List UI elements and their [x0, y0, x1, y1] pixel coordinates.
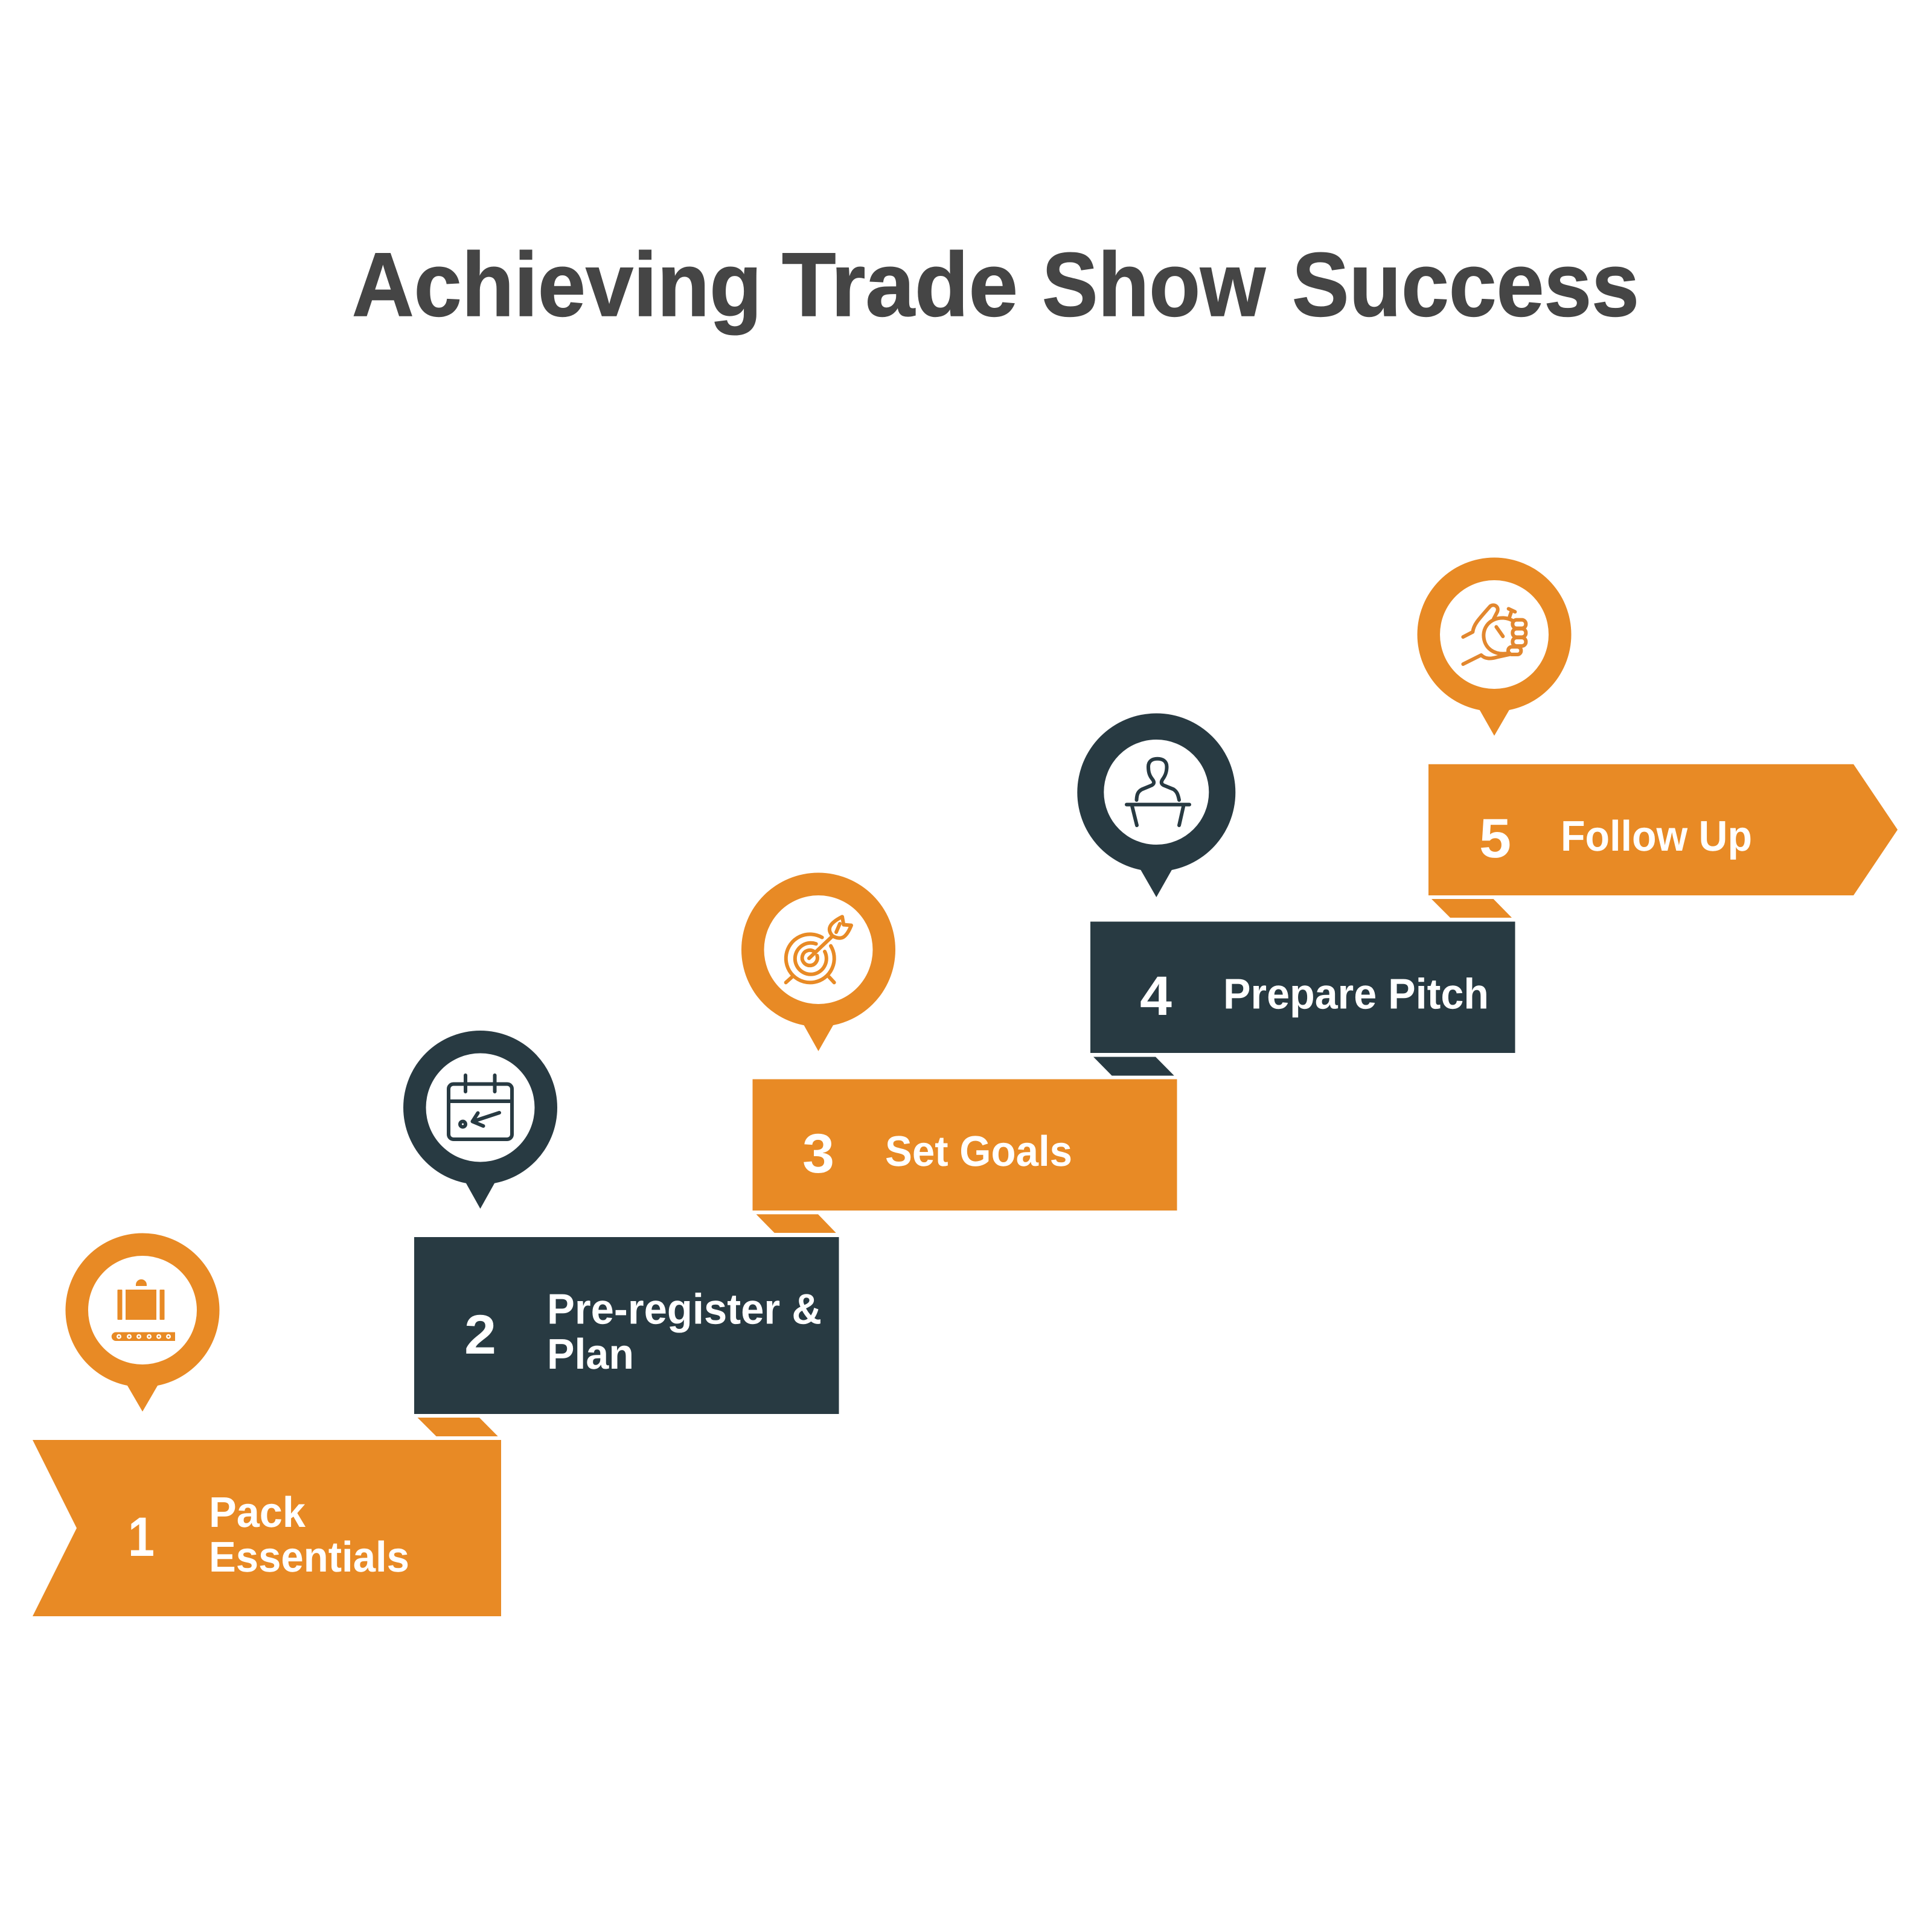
- number 1: 1: [128, 1506, 155, 1568]
- label: Pack Essentials: Pack: [209, 1489, 305, 1537]
- label: Pack Essentials: Essentials: [209, 1534, 409, 1581]
- panel: step 5: [1418, 558, 1898, 918]
- label: Prepare Pitch: Prepare Pitch: [1223, 971, 1489, 1018]
- number 4: 4: [1140, 965, 1172, 1027]
- number 5: 5: [1479, 808, 1511, 869]
- banner 4: [1090, 921, 1515, 1053]
- title: Show: [1042, 234, 1265, 335]
- number 3: 3: [802, 1123, 834, 1185]
- fold under banner 4: [1093, 1057, 1174, 1076]
- icon: luggage on conveyor: [112, 1279, 175, 1341]
- banner 1: [33, 1440, 501, 1616]
- number 2: 2: [464, 1304, 496, 1366]
- title: Trade: [782, 234, 1018, 335]
- label: Set Goals: Set Goals: [885, 1128, 1072, 1176]
- banner 2: [414, 1237, 839, 1414]
- title: Achieving: [352, 234, 762, 335]
- fold under banner 5: [1431, 899, 1512, 918]
- pin 1: [65, 1233, 220, 1412]
- label: Pre-register & Plan: Plan: [547, 1331, 634, 1378]
- icon: target with arrow: [786, 916, 851, 982]
- icon: calendar with arrow: [449, 1075, 512, 1139]
- fold under banner 2: [418, 1418, 498, 1436]
- panel: step 2: [403, 1031, 839, 1436]
- pin 2: [403, 1031, 557, 1209]
- banner 5: [1428, 764, 1898, 895]
- icon: hand holding stopwatch: [1463, 605, 1526, 664]
- label: Follow Up: Follow Up: [1561, 813, 1752, 860]
- title: Success: [1292, 234, 1639, 335]
- fold under banner 3: [756, 1214, 836, 1233]
- banner 3: [752, 1080, 1177, 1211]
- panel: step 4: [1077, 714, 1515, 1076]
- label: Pre-register & Plan: Pre-register &: [547, 1286, 822, 1333]
- icon: speaker at podium: [1127, 759, 1189, 825]
- pin 5: [1418, 558, 1571, 736]
- panel: step 1: [33, 1233, 501, 1616]
- pin 3: [741, 873, 895, 1051]
- pin 4: [1077, 714, 1235, 897]
- panel: step 3: [741, 873, 1177, 1233]
